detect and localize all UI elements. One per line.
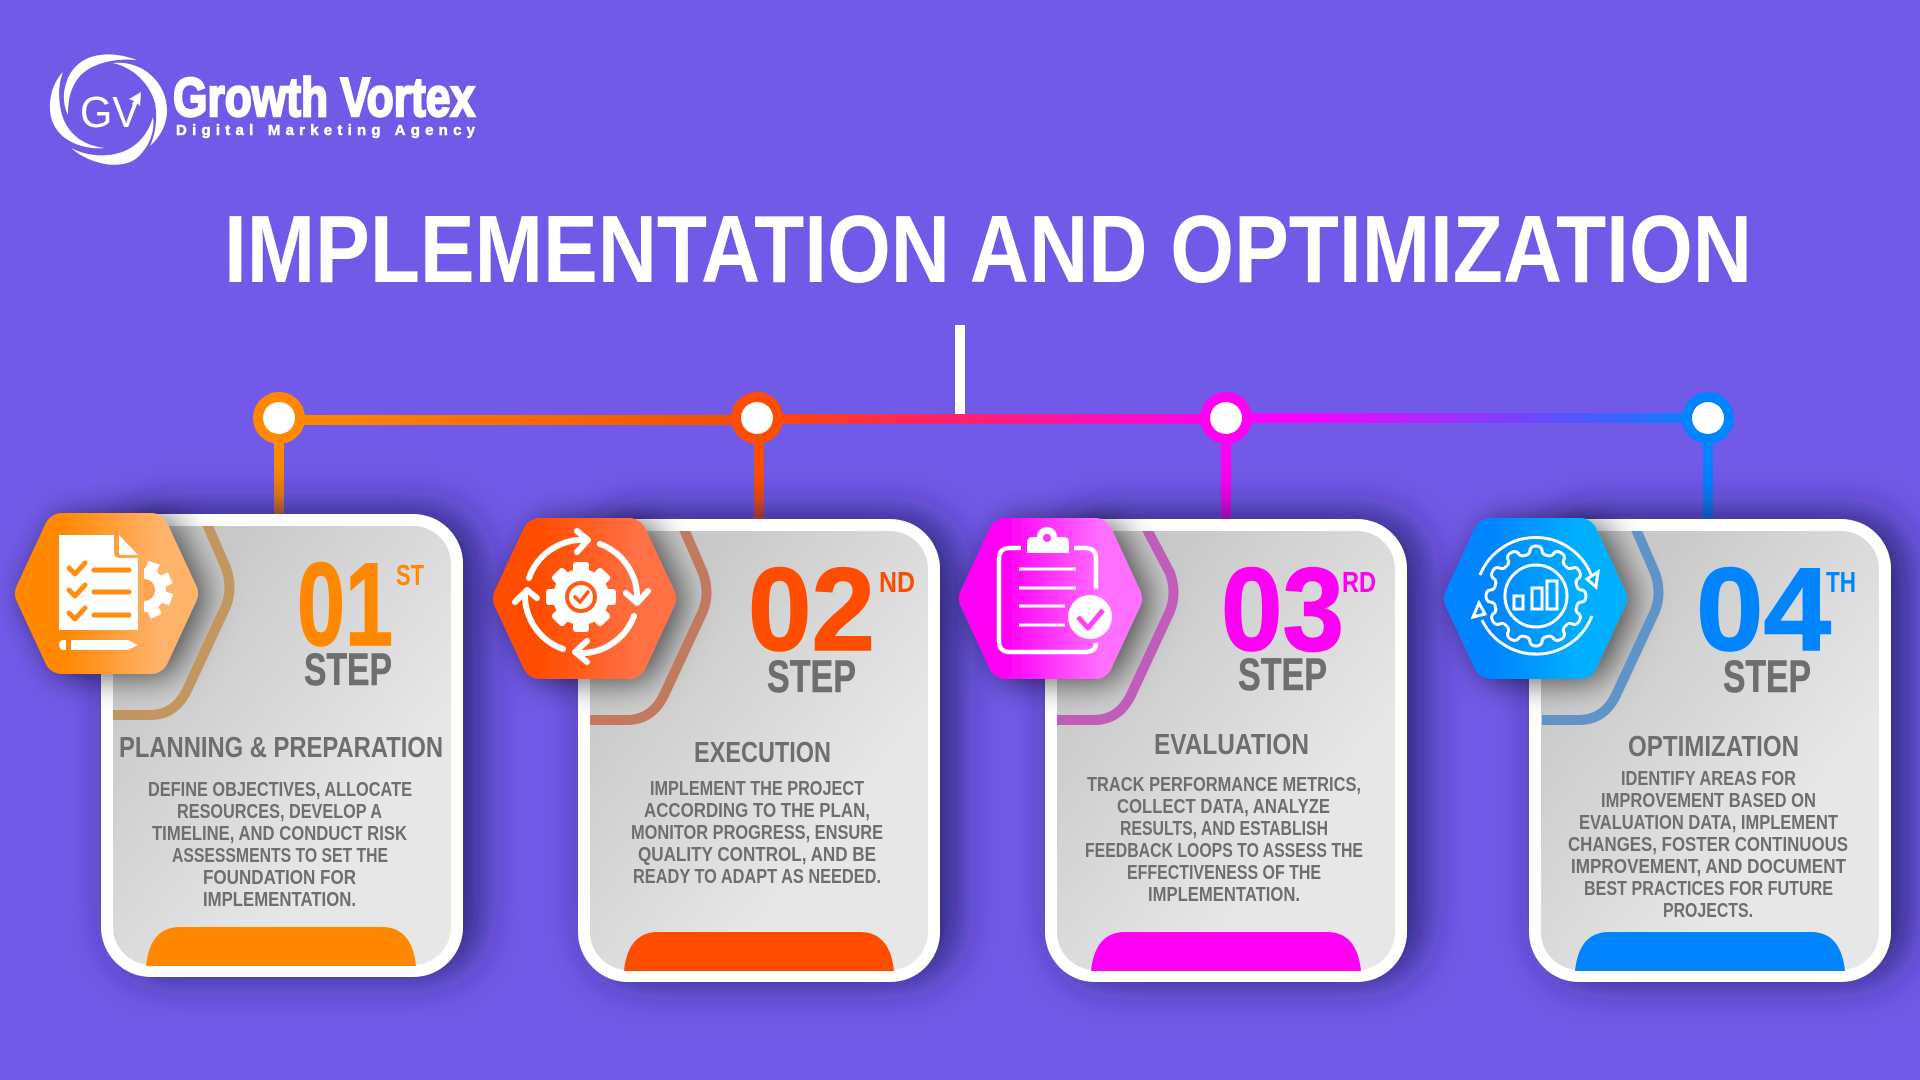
hexagon badge 2	[511, 536, 658, 661]
description: RESOURCES, DEVELOP A	[177, 801, 382, 823]
hexagon badge 1	[33, 531, 180, 656]
heading: OPTIMIZATION	[1628, 731, 1799, 763]
description: BEST PRACTICES FOR FUTURE	[1584, 878, 1833, 900]
description: FEEDBACK LOOPS TO ASSESS THE	[1085, 840, 1363, 862]
icon: gear with cycle arrows	[515, 531, 648, 662]
description: RESULTS, AND ESTABLISH	[1120, 818, 1328, 840]
step number 02: 02	[748, 544, 875, 676]
step number 03: 03	[1221, 544, 1344, 676]
description: COLLECT DATA, ANALYZE	[1117, 796, 1330, 818]
connector 2	[754, 430, 764, 525]
description: IDENTIFY AREAS FOR	[1621, 768, 1796, 790]
description: TRACK PERFORMANCE METRICS,	[1087, 774, 1361, 796]
description: IMPLEMENT THE PROJECT	[650, 778, 864, 800]
bottom tab 4	[1575, 932, 1845, 971]
bottom tab 2	[624, 932, 894, 971]
step label: STEP	[767, 651, 856, 702]
heading: EVALUATION	[1154, 729, 1309, 761]
step label: STEP	[304, 644, 392, 695]
description: CHANGES, FOSTER CONTINUOUS	[1568, 834, 1848, 856]
description: ASSESSMENTS TO SET THE	[172, 845, 388, 867]
bottom tab 3	[1091, 932, 1361, 971]
timeline	[253, 325, 1734, 525]
panel: step 1 planning and preparation	[33, 514, 463, 977]
card body 3	[1045, 519, 1407, 982]
ordinal ND: ND	[879, 567, 915, 599]
description: FOUNDATION FOR	[203, 867, 356, 889]
node 2	[731, 392, 783, 444]
description: MONITOR PROGRESS, ENSURE	[631, 822, 883, 844]
heading: PLANNING & PREPARATION	[119, 732, 443, 764]
hexagon badge 3	[977, 536, 1124, 661]
step label: STEP	[1723, 651, 1811, 702]
description: IMPROVEMENT, AND DOCUMENT	[1571, 856, 1846, 878]
description	[1085, 774, 1363, 906]
hexagon badge 4	[1462, 536, 1609, 661]
description: IMPROVEMENT BASED ON	[1601, 790, 1816, 812]
description	[148, 779, 412, 911]
logo name: Growth Vortex	[173, 66, 475, 128]
description: EFFECTIVENESS OF THE	[1127, 862, 1321, 884]
title stem	[955, 325, 965, 415]
logo tagline: Digital Marketing Agency	[176, 122, 476, 139]
description	[1568, 768, 1848, 922]
connector 4	[1703, 430, 1713, 525]
logo monogram: GV	[80, 88, 141, 137]
timeline segment 2	[756, 414, 1225, 424]
ordinal RD: RD	[1342, 567, 1376, 599]
description: PROJECTS.	[1663, 900, 1753, 922]
ordinal ST: ST	[396, 560, 424, 592]
description: ACCORDING TO THE PLAN,	[644, 800, 870, 822]
description: IMPLEMENTATION.	[203, 889, 356, 911]
connector 1	[274, 430, 284, 520]
panel: step 4 optimization	[1462, 519, 1891, 982]
panel: step 3 evaluation	[977, 519, 1407, 982]
card body 2	[578, 519, 940, 982]
icon: checklist document with gear	[59, 535, 173, 650]
ordinal TH: TH	[1826, 567, 1856, 599]
hexagon outline 4	[1529, 520, 1658, 720]
description	[631, 778, 883, 888]
panel: step 2 execution	[511, 519, 940, 982]
connector 3	[1221, 430, 1231, 525]
step number 01: 01	[297, 539, 393, 671]
hexagon outline 3	[1044, 520, 1174, 720]
description: DEFINE OBJECTIVES, ALLOCATE	[148, 779, 412, 801]
description: IMPLEMENTATION.	[1148, 884, 1300, 906]
card body 4	[1529, 519, 1891, 982]
hexagon outline 1	[100, 515, 230, 715]
description: TIMELINE, AND CONDUCT RISK	[152, 823, 407, 845]
logo: Growth Vortex	[50, 54, 476, 165]
description: QUALITY CONTROL, AND BE	[638, 844, 876, 866]
heading: EXECUTION	[694, 737, 831, 769]
node 3	[1200, 392, 1252, 444]
bottom tab 1	[146, 927, 416, 966]
description: READY TO ADAPT AS NEEDED.	[633, 866, 881, 888]
timeline segment 1	[278, 415, 756, 425]
logo swirl mark	[50, 54, 167, 165]
icon: gear with bar chart	[1473, 538, 1598, 654]
node 1	[253, 392, 305, 444]
step number 04: 04	[1696, 544, 1831, 676]
step label: STEP	[1238, 649, 1327, 700]
hexagon outline 2	[577, 520, 706, 720]
card body 1	[101, 514, 463, 977]
description: EVALUATION DATA, IMPLEMENT	[1579, 812, 1838, 834]
node 4	[1682, 392, 1734, 444]
timeline segment 3	[1225, 413, 1707, 423]
icon: clipboard with check	[999, 527, 1112, 652]
